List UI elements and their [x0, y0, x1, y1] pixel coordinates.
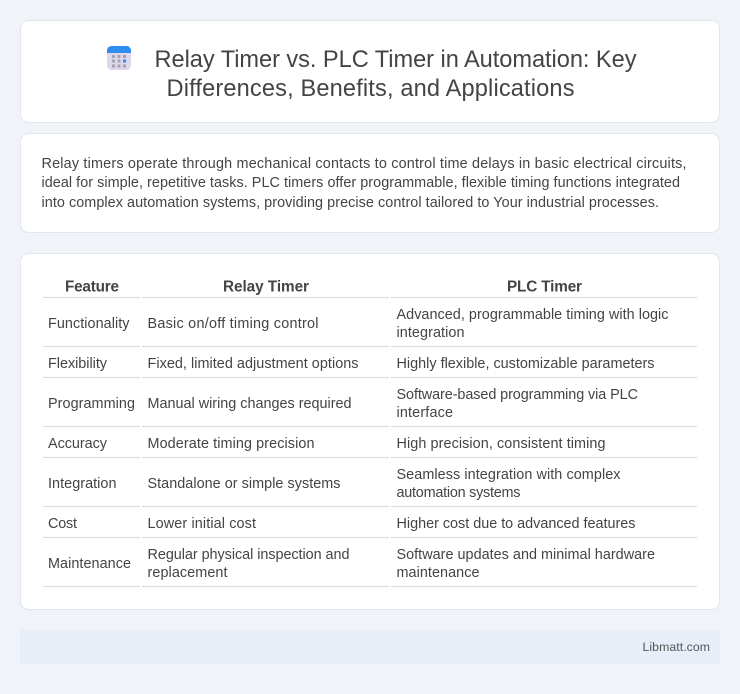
row: accuracy: Accuracy	[48, 436, 108, 452]
row: integration: Seamless integration with complex	[396, 467, 621, 483]
text block: introduction paragraph: ideal for simple, repetitive tasks. PLC timers offer programmable, flexible timing functions integrated	[42, 175, 680, 191]
row: functionality: integration	[396, 325, 464, 341]
row: flexibility	[48, 356, 654, 372]
title	[154, 47, 637, 102]
footer credit: Libmatt.com	[642, 640, 710, 654]
row: flexibility: Flexibility	[48, 356, 108, 372]
panel: title card	[20, 20, 720, 122]
table header	[65, 278, 582, 296]
table header: PLC Timer	[507, 278, 582, 296]
row: functionality	[48, 307, 668, 341]
row: flexibility: Fixed, limited adjustment options	[148, 356, 358, 372]
row: maintenance: replacement	[148, 565, 228, 581]
row: integration: Standalone or simple systems	[148, 476, 340, 492]
row: functionality: Advanced, programmable timing with logic	[396, 307, 668, 323]
row: functionality: Basic on/off timing control	[148, 316, 318, 332]
row: integration	[48, 467, 621, 501]
icon: calendar	[107, 46, 131, 70]
text block: introduction paragraph	[42, 156, 686, 211]
text block: introduction paragraph: Relay timers operate through mechanical contacts to control time delays in basic electrical circuits,	[42, 156, 686, 172]
panel: comparison table	[20, 254, 720, 610]
footer bar	[20, 630, 720, 664]
table header: Feature	[65, 278, 119, 296]
row: integration: automation systems	[396, 485, 520, 501]
row: programming: Manual wiring changes required	[148, 396, 352, 412]
table row dividers	[43, 298, 697, 586]
row: programming: interface	[396, 405, 453, 421]
row: maintenance: Regular physical inspection and	[148, 547, 350, 563]
row: functionality: Functionality	[48, 316, 130, 332]
panel: introduction	[20, 134, 720, 232]
row: cost	[48, 516, 636, 532]
title: Differences, Benefits, and Applications	[166, 76, 574, 102]
row: flexibility: Highly flexible, customizable parameters	[396, 356, 654, 372]
text block: introduction paragraph: into complex automation systems, providing precise control tailored to Your industrial processes.	[42, 195, 659, 211]
row: cost: Cost	[48, 516, 77, 532]
row: accuracy	[48, 436, 606, 452]
row: maintenance: Maintenance	[48, 556, 131, 572]
table header: Relay Timer	[223, 278, 309, 296]
row: maintenance: Software updates and minimal hardware	[396, 547, 655, 563]
row: maintenance: maintenance	[396, 565, 480, 581]
row: accuracy: High precision, consistent timing	[396, 436, 606, 452]
row: cost: Lower initial cost	[148, 516, 256, 532]
row: cost: Higher cost due to advanced features	[396, 516, 636, 532]
row: programming: Programming	[48, 396, 135, 412]
row: programming: Software-based programming via PLC	[396, 387, 638, 403]
row: accuracy: Moderate timing precision	[148, 436, 314, 452]
row: maintenance	[48, 547, 655, 581]
row: programming	[48, 387, 638, 421]
title: Relay Timer vs. PLC Timer in Automation: Key	[154, 47, 637, 73]
row: integration: Integration	[48, 476, 116, 492]
